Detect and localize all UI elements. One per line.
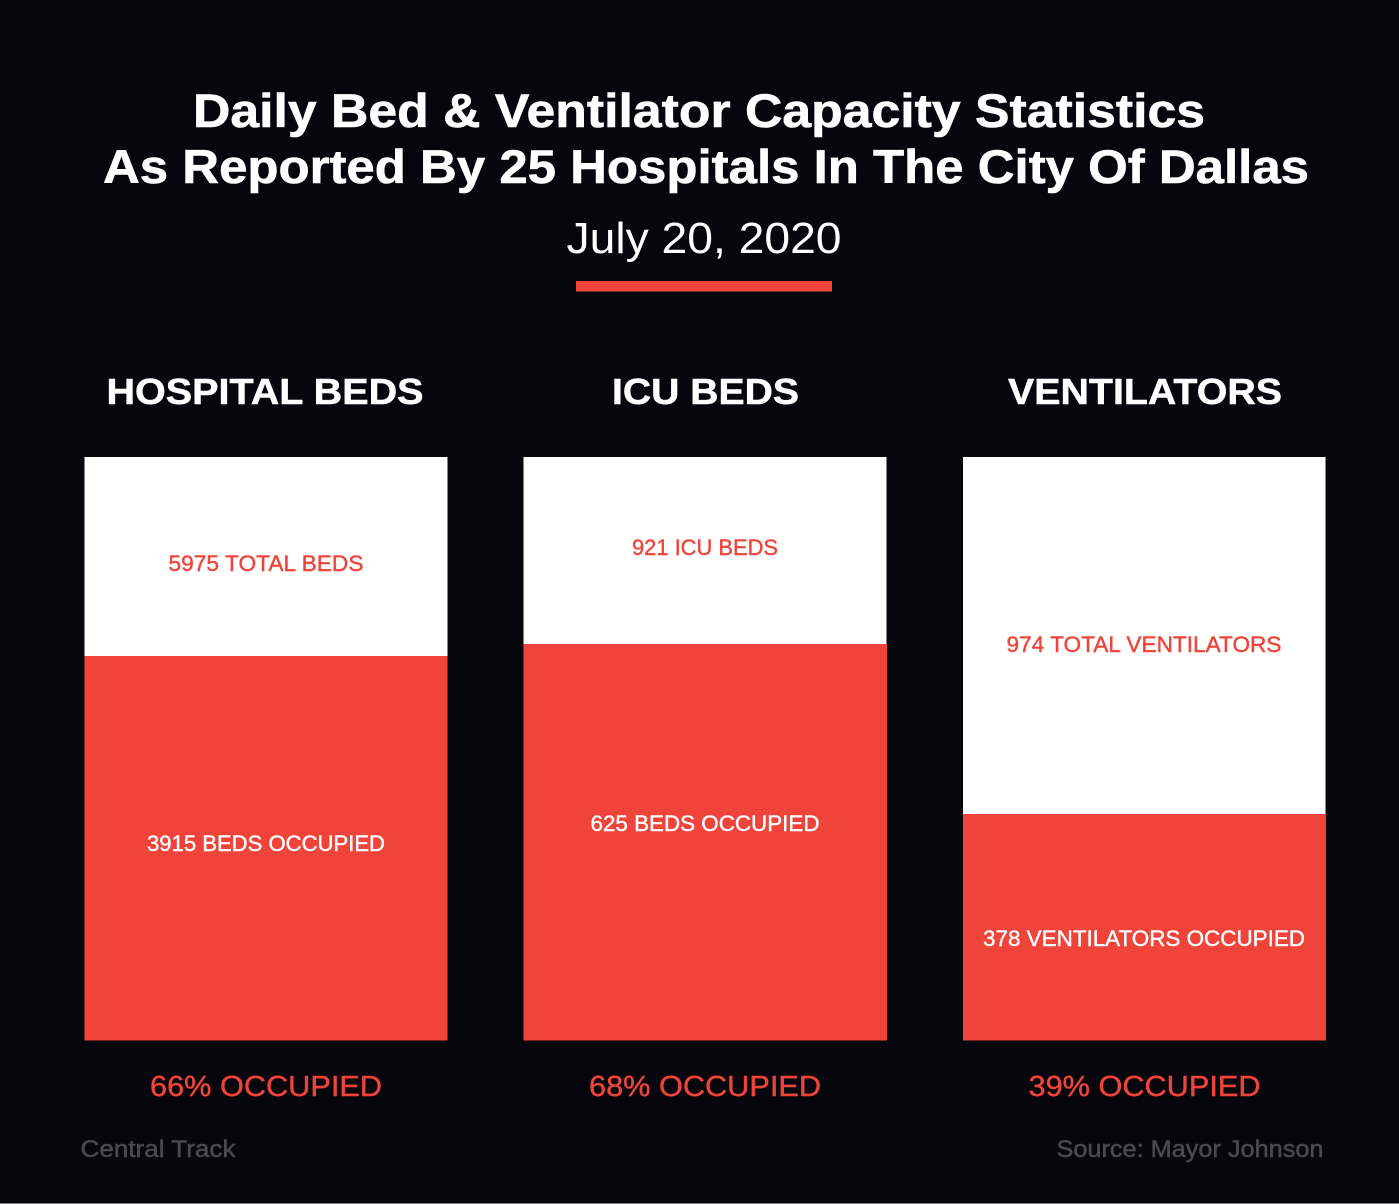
title: As Reported By 25 Hospitals In The City Of Dallas (103, 140, 1309, 193)
credit: source: Source: Mayor Johnson (1056, 1136, 1324, 1163)
credit: central track: Central Track (80, 1136, 237, 1163)
label: beds occupied: 3915 BEDS OCCUPIED (147, 831, 385, 856)
title (103, 84, 1309, 193)
label: icu beds total: 921 ICU BEDS (632, 535, 778, 560)
bar: total ventilators (963, 457, 1326, 814)
bar: icu beds occupied (524, 644, 887, 1040)
percent occupied: 66% OCCUPIED (150, 1071, 382, 1103)
panel: icu beds (524, 371, 887, 1103)
heading: hospital beds: HOSPITAL BEDS (106, 371, 424, 412)
heading: ventilators: VENTILATORS (1008, 371, 1282, 412)
panel: hospital beds (84, 371, 448, 1103)
bar: icu beds total (524, 457, 886, 644)
label: icu beds occupied: 625 BEDS OCCUPIED (590, 811, 820, 836)
heading: icu beds: ICU BEDS (612, 371, 799, 412)
date subtitle: July 20, 2020 (566, 214, 842, 263)
bar: beds occupied (84, 656, 448, 1040)
bar: ventilators occupied (963, 814, 1326, 1040)
red accent underline (576, 281, 832, 292)
bar: total beds (84, 457, 448, 656)
label: total beds: 5975 TOTAL BEDS (168, 551, 364, 576)
percent occupied: 39% OCCUPIED (1028, 1071, 1260, 1103)
label: total ventilators: 974 TOTAL VENTILATORS (1006, 632, 1282, 657)
label: ventilators occupied: 378 VENTILATORS OCCUPIED (983, 926, 1305, 951)
panel: ventilators (963, 371, 1326, 1103)
percent occupied: 68% OCCUPIED (589, 1071, 821, 1103)
title: Daily Bed & Ventilator Capacity Statistics (193, 84, 1205, 137)
